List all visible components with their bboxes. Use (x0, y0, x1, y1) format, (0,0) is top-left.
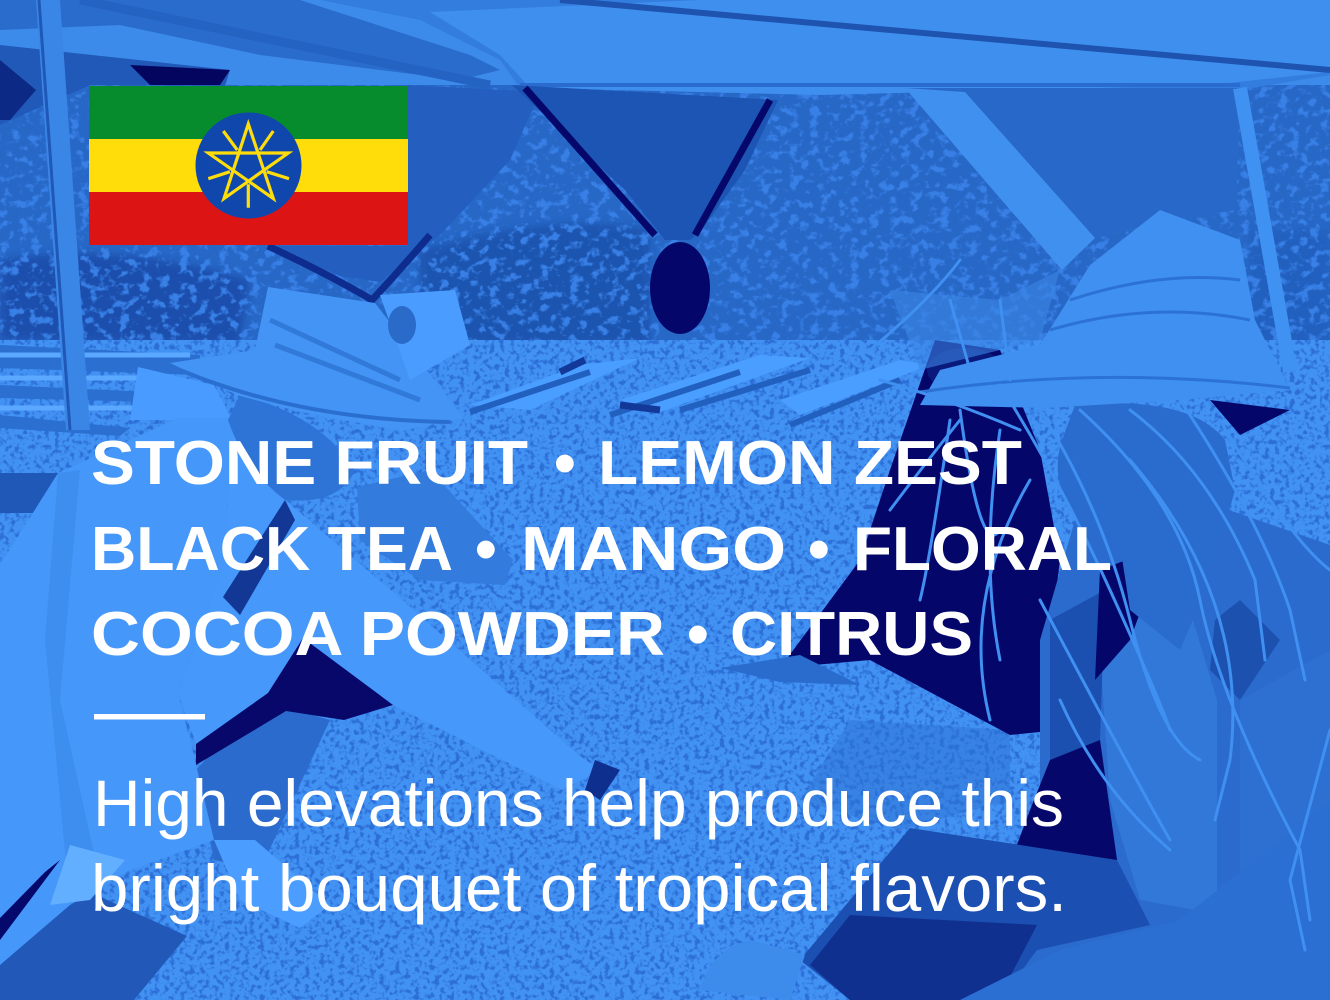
body text: High elevations help produce this (93, 766, 1064, 840)
headline: flavor notes: MANGO (521, 515, 786, 584)
headline: flavor notes: COCOA POWDER (91, 600, 665, 669)
left worker (0, 287, 620, 965)
body text (91, 766, 1067, 925)
headline: flavor notes: FLORAL (853, 515, 1112, 584)
headline: flavor notes: LEMON ZEST (598, 429, 1022, 498)
headline: flavor notes: • (808, 515, 830, 584)
divider rule (94, 714, 205, 720)
sleeve (800, 828, 1150, 1000)
headline: flavor notes (91, 429, 1112, 669)
flag emblem: star and rays (208, 124, 289, 208)
tie and shadows (223, 500, 295, 615)
hand (700, 940, 805, 1000)
body text: bright bouquet of tropical flavors. (91, 851, 1067, 925)
right worker (700, 210, 1330, 1000)
headline: flavor notes: CITRUS (730, 600, 973, 669)
scarf (1097, 608, 1217, 914)
hand on beans (214, 840, 330, 928)
flag of Ethiopia (89, 86, 408, 245)
face (228, 395, 355, 501)
headline: flavor notes: • (554, 429, 576, 498)
canopy cloth (0, 0, 1330, 430)
coat (920, 500, 1330, 1000)
bean bed (0, 340, 1330, 1000)
headline: flavor notes: BLACK TEA (91, 515, 453, 584)
straw strands (870, 260, 1330, 950)
second worker (357, 470, 513, 585)
hat (170, 287, 464, 431)
drying tables (0, 345, 930, 513)
mat bottom left (0, 872, 187, 1000)
hat (920, 210, 1290, 408)
lapel shadow (1050, 590, 1117, 860)
coat front and arm (178, 418, 600, 790)
face and neck (1058, 403, 1235, 650)
headline: flavor notes: STONE FRUIT (91, 429, 528, 498)
headline: flavor notes: • (687, 600, 709, 669)
trees background (0, 85, 1330, 350)
coat body (0, 418, 232, 965)
hanging nets (268, 85, 1290, 370)
headline: flavor notes: • (475, 515, 497, 584)
dark centre worker (720, 340, 1060, 735)
coat behind hat (130, 367, 232, 420)
